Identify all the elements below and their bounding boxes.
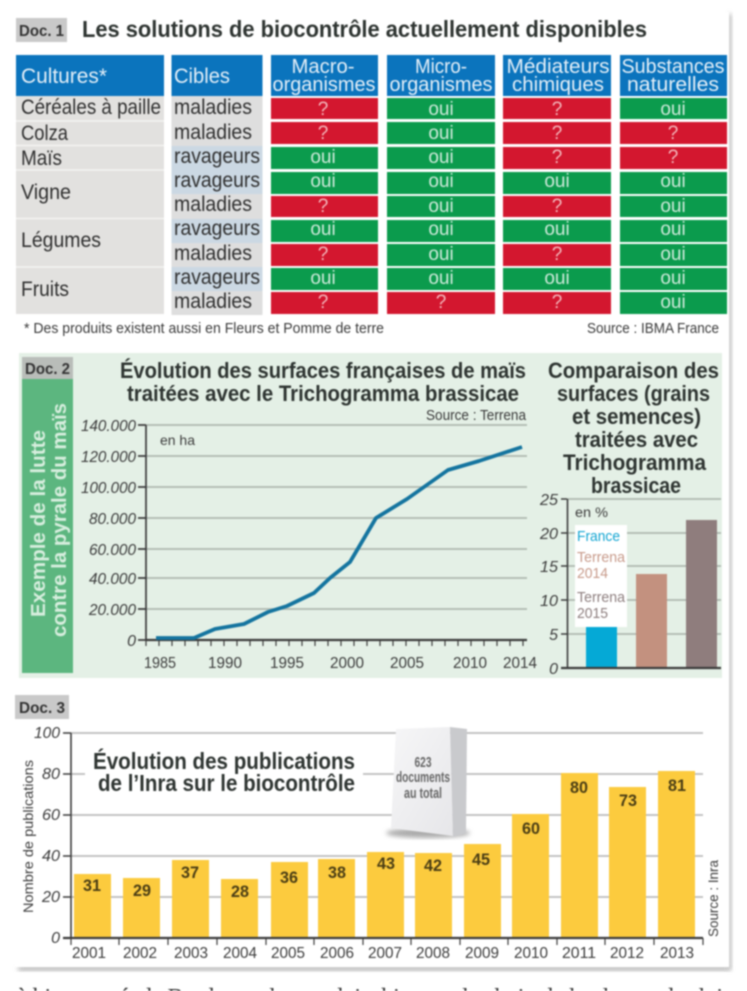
Micro-organismes column: oui xyxy=(428,219,454,240)
crops column: Légumes xyxy=(21,229,101,252)
heading: bar chart xyxy=(548,358,719,498)
line chart: surfaces: en ha xyxy=(160,432,195,448)
Substances naturelles column: oui xyxy=(660,292,686,313)
Macro-organismes column: ? xyxy=(318,196,328,217)
table header row: Macro- xyxy=(292,56,354,78)
Médiateurs chimiques column: ? xyxy=(552,292,562,313)
Doc. 1 tag xyxy=(16,18,67,42)
legend: France xyxy=(577,528,620,545)
targets column: maladies xyxy=(174,96,252,119)
source: Doc. 1: Source : IBMA France xyxy=(587,320,719,337)
heading: Doc. 3: de l’Inra sur le biocontrôle xyxy=(98,770,355,796)
line chart: surfaces: 0 xyxy=(127,633,136,650)
Micro-organismes column xyxy=(387,98,495,314)
Micro-organismes column: oui xyxy=(428,268,454,289)
legend: 2014 xyxy=(577,565,608,582)
heading: Doc. 3: Évolution des publications xyxy=(93,747,355,774)
bar chart: publications: 2009 xyxy=(465,945,499,962)
Micro-organismes column: oui xyxy=(428,99,454,120)
Médiateurs chimiques column xyxy=(503,98,611,314)
bar chart: publications: 2008 xyxy=(416,945,450,962)
table header row: Médiateurs xyxy=(506,56,610,78)
Micro-organismes column: oui xyxy=(428,244,454,265)
heading: line chart: traitées avec le Trichogramma brassicae xyxy=(127,381,519,406)
Macro-organismes column: oui xyxy=(310,171,336,192)
targets column: maladies xyxy=(174,290,252,313)
bar chart: comparison: 20 xyxy=(539,526,558,543)
table header row: Cibles xyxy=(174,65,230,88)
table header row: organismes xyxy=(390,74,492,96)
bar chart: publications: 29 xyxy=(133,881,151,900)
Macro-organismes column: oui xyxy=(310,147,336,168)
bar chart: publications: 28 xyxy=(231,882,249,901)
bar chart: publications: 42 xyxy=(424,856,442,875)
bar chart: publications: 100 xyxy=(34,725,60,742)
Médiateurs chimiques column: ? xyxy=(552,147,562,168)
bar chart: publications: 37 xyxy=(181,863,199,882)
line chart: surfaces: 80.000 xyxy=(89,511,136,528)
Doc. 3 tag: Doc. 3 xyxy=(19,700,65,717)
table header row: organismes xyxy=(272,74,376,96)
Doc. 2 tag: Doc. 2 xyxy=(25,361,70,378)
bar chart: publications: 2001 xyxy=(72,945,106,962)
heading: bar chart: surfaces (grains xyxy=(557,381,710,406)
Micro-organismes column: oui xyxy=(428,196,454,217)
bar chart: publications: 31 xyxy=(83,876,101,895)
Médiateurs chimiques column: ? xyxy=(552,123,562,144)
Substances naturelles column: ? xyxy=(668,123,678,144)
targets column: ravageurs xyxy=(174,217,260,240)
Macro-organismes column: ? xyxy=(318,244,328,265)
Macro-organismes column xyxy=(271,98,378,314)
targets column: maladies xyxy=(174,242,252,265)
Médiateurs chimiques column: oui xyxy=(544,171,570,192)
bar chart: publications: 2011 xyxy=(562,945,596,962)
bar chart: publications: 45 xyxy=(472,850,490,869)
line chart: surfaces: 140.000 xyxy=(81,418,136,435)
side banner: contre la pyrale du maïs xyxy=(49,403,71,637)
bar chart: publications: 0 xyxy=(51,930,60,947)
Micro-organismes column: oui xyxy=(428,123,454,144)
bar chart: publications: 38 xyxy=(328,863,346,882)
Médiateurs chimiques column: oui xyxy=(544,219,570,240)
bar chart: publications: 2010 xyxy=(514,945,548,962)
legend: Terrena xyxy=(577,549,626,566)
Médiateurs chimiques column: oui xyxy=(544,268,570,289)
side banner: Exemple de la lutte xyxy=(28,430,50,617)
crops column: Colza xyxy=(21,122,68,145)
Doc. 1 tag: Doc. 1 xyxy=(19,23,64,40)
Doc. 3 tag xyxy=(15,695,69,719)
panel: Doc. 1 biocontrol solutions table xyxy=(16,16,727,337)
heading: bar chart: Comparaison des xyxy=(548,358,719,383)
crops column: Fruits xyxy=(21,278,69,301)
heading: bar chart: traitées avec xyxy=(575,427,698,452)
panel: Doc. 2 xyxy=(19,353,722,678)
legend: Terrena xyxy=(577,589,626,606)
line chart: surfaces: 1985 xyxy=(144,655,176,672)
table header row: Cultures* xyxy=(21,65,107,88)
legend xyxy=(577,528,626,622)
panel: Doc. 3 xyxy=(15,695,721,962)
Micro-organismes column: ? xyxy=(436,292,446,313)
Macro-organismes column: ? xyxy=(318,99,328,120)
bar chart: publications: 20 xyxy=(41,889,60,906)
bar chart: publications: Nombre de publications xyxy=(20,760,36,913)
line chart: surfaces xyxy=(81,418,537,672)
targets column: ravageurs xyxy=(174,145,260,168)
line chart: surfaces: 120.000 xyxy=(81,449,136,466)
bar chart: publications: 40 xyxy=(42,848,60,865)
icon: book, 623 documents: au total xyxy=(404,785,442,802)
Macro-organismes column: ? xyxy=(318,123,328,144)
crops column: Céréales à paille xyxy=(21,96,161,119)
Macro-organismes column: ? xyxy=(318,292,328,313)
footnote: * Des produits existent aussi en Fleurs et Pomme de terre xyxy=(24,320,384,337)
source: Doc. 2: Source : Terrena xyxy=(426,407,527,424)
heading: line chart xyxy=(120,358,526,406)
crops column xyxy=(16,96,164,314)
bar chart: comparison: 5 xyxy=(549,627,558,644)
icon: book, 623 documents xyxy=(386,727,470,838)
icon: book, 623 documents: documents xyxy=(396,769,450,786)
bar chart: publications: 60 xyxy=(42,807,60,824)
bar chart: publications: 43 xyxy=(377,854,395,873)
targets column xyxy=(172,96,262,315)
Micro-organismes column: oui xyxy=(428,147,454,168)
bar chart: publications: 81 xyxy=(668,776,686,795)
bar chart: comparison: 25 xyxy=(539,492,558,509)
bar chart: publications: 80 xyxy=(570,778,588,797)
bar chart: publications: 2006 xyxy=(320,945,354,962)
heading: bar chart: Trichogramma xyxy=(563,450,707,475)
table header row: Micro- xyxy=(415,56,467,78)
Substances naturelles column: oui xyxy=(660,196,686,217)
bar chart: publications: 80 xyxy=(42,766,60,783)
table header row: chimiques xyxy=(512,74,604,96)
targets column: maladies xyxy=(174,121,252,144)
bar chart: comparison: en % xyxy=(575,504,608,520)
heading: line chart: Évolution des surfaces françaises de maïs xyxy=(120,358,526,383)
bar chart: publications: Source : Inra xyxy=(705,860,721,937)
heading: Doc. 3 xyxy=(93,747,355,796)
side banner xyxy=(22,379,73,673)
line chart: surfaces: 2005 xyxy=(390,655,424,672)
bar chart: publications: 2002 xyxy=(123,945,157,962)
legend: 2015 xyxy=(577,605,608,622)
Substances naturelles column xyxy=(620,98,727,314)
line chart: surfaces: 2010 xyxy=(453,655,487,672)
Substances naturelles column: oui xyxy=(660,219,686,240)
Médiateurs chimiques column: ? xyxy=(552,196,562,217)
line chart: surfaces: 2000 xyxy=(330,655,364,672)
Micro-organismes column: oui xyxy=(428,171,454,192)
line chart: surfaces: 1990 xyxy=(208,655,242,672)
line chart: surfaces: 100.000 xyxy=(81,480,136,497)
targets column: ravageurs xyxy=(174,169,260,192)
Substances naturelles column: oui xyxy=(660,244,686,265)
Médiateurs chimiques column: ? xyxy=(552,244,562,265)
bar chart: publications: 2004 xyxy=(223,945,257,962)
Substances naturelles column: oui xyxy=(660,171,686,192)
bar chart: publications: 2007 xyxy=(368,945,402,962)
bar chart: publications: 36 xyxy=(280,868,298,887)
bar chart: comparison: 10 xyxy=(540,593,558,610)
Médiateurs chimiques column: ? xyxy=(552,99,562,120)
Substances naturelles column: oui xyxy=(660,99,686,120)
heading: bar chart: et semences) xyxy=(572,404,701,429)
Macro-organismes column: oui xyxy=(310,268,336,289)
line chart: surfaces: 60.000 xyxy=(89,542,136,559)
icon: book, 623 documents: 623 xyxy=(414,754,432,771)
bar chart: publications: 2005 xyxy=(271,945,305,962)
bar chart: publications xyxy=(20,725,721,962)
heading: Doc. 1: Les solutions de biocontrôle actuellement disponibles xyxy=(82,16,647,42)
Substances naturelles column: oui xyxy=(660,268,686,289)
line chart: surfaces: 40.000 xyxy=(89,571,136,588)
bar chart: publications: 73 xyxy=(619,791,637,810)
table header row: Substances xyxy=(622,56,724,78)
targets column: ravageurs xyxy=(174,266,260,289)
bar chart: publications: 2013 xyxy=(660,945,694,962)
table header row: naturelles xyxy=(627,74,719,96)
crops column: Vigne xyxy=(21,181,71,204)
line chart: surfaces: 20.000 xyxy=(88,602,136,619)
bar chart: publications: 2003 xyxy=(174,945,208,962)
line chart: surfaces: 2014 xyxy=(503,655,537,672)
Substances naturelles column: ? xyxy=(668,147,678,168)
crops column: Maïs xyxy=(21,147,62,170)
bar chart: publications: 60 xyxy=(522,819,540,838)
bar chart: comparison: 0 xyxy=(549,661,558,678)
table header row xyxy=(16,55,727,96)
heading: bar chart: brassicae xyxy=(591,473,681,498)
targets column: maladies xyxy=(174,193,252,216)
line chart: surfaces: 1995 xyxy=(270,655,304,672)
bar chart: comparison: 15 xyxy=(540,559,558,576)
Macro-organismes column: oui xyxy=(310,219,336,240)
bar chart: publications: 2012 xyxy=(610,945,644,962)
bar chart: comparison xyxy=(539,492,721,678)
